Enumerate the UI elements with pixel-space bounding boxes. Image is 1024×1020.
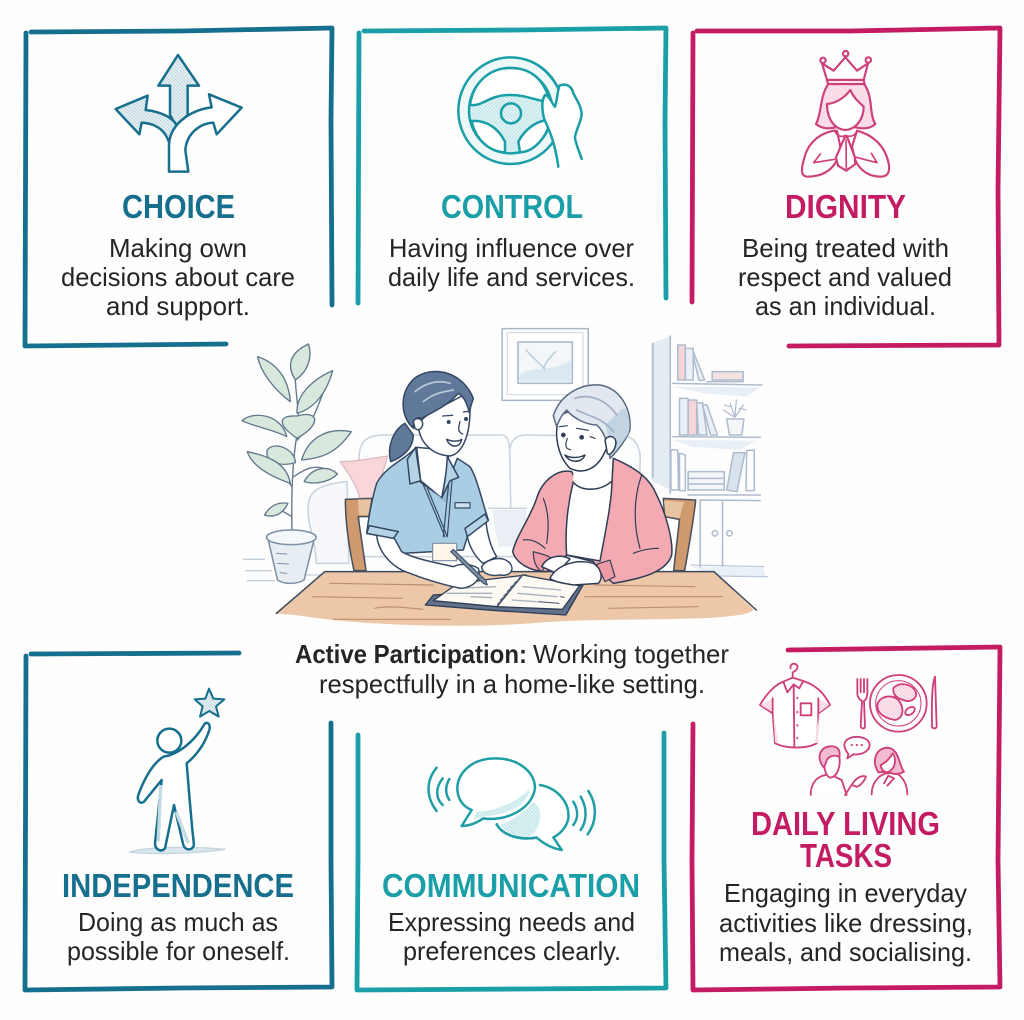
- frame: independence: [25, 653, 332, 990]
- text: control description: Having influence over: [389, 233, 634, 263]
- frame: control: [358, 28, 666, 303]
- icon: speech bubbles: [429, 758, 595, 850]
- frame: daily living tasks: [692, 647, 1000, 990]
- icon: crowned person: [802, 51, 889, 177]
- text: daily living tasks description: meals, and socialising.: [719, 937, 972, 967]
- frame: communication: [357, 733, 666, 990]
- carer: [367, 371, 512, 588]
- notebook: [425, 575, 583, 615]
- sofa: [308, 435, 640, 563]
- panel: control: [358, 28, 666, 303]
- text: communication description: [388, 907, 635, 966]
- pot: [267, 530, 316, 583]
- illustration: carer and older woman at a table: [242, 329, 767, 626]
- frame: dignity: [692, 28, 1000, 346]
- caption: respectfully in a home-like setting.: [319, 669, 705, 699]
- text: communication description: preferences clearly.: [403, 936, 621, 966]
- text: daily living tasks description: activities like dressing,: [719, 908, 973, 938]
- heading: communication: COMMUNICATION: [382, 867, 640, 904]
- bookcase: [651, 336, 762, 567]
- text: independence description: [67, 907, 290, 966]
- picture frame: [502, 329, 588, 400]
- plant: [242, 344, 351, 533]
- text: communication description: Expressing needs and: [388, 907, 635, 937]
- heading: daily living tasks: [751, 805, 940, 874]
- icon: figure reaching for star: [129, 689, 225, 854]
- icon: steering wheel and hand: [458, 57, 582, 167]
- panel: dignity: [692, 28, 1000, 346]
- chairs: [345, 498, 696, 571]
- heading: daily living tasks: DAILY LIVING: [751, 805, 940, 842]
- floor and room background: [244, 559, 767, 581]
- text: control description: [388, 233, 635, 292]
- heading: daily living tasks: TASKS: [800, 837, 892, 874]
- older woman: [513, 385, 672, 585]
- text: dignity description: respect and valued: [738, 262, 952, 292]
- icon: meal with cutlery: [857, 675, 937, 732]
- text: choice description: and support.: [106, 291, 250, 321]
- icon: two people talking: [811, 737, 907, 795]
- caption: Working together: [533, 639, 729, 669]
- text: control description: daily life and services.: [388, 262, 635, 292]
- heading: choice: CHOICE: [122, 188, 235, 225]
- text: dignity description: as an individual.: [755, 291, 936, 321]
- table: [275, 572, 756, 626]
- caption: Active Participation:: [295, 639, 527, 669]
- caption: [295, 639, 729, 699]
- heading: dignity: DIGNITY: [785, 188, 906, 225]
- text: choice description: [61, 233, 295, 321]
- text: independence description: Doing as much as: [78, 907, 278, 937]
- text: daily living tasks description: Engaging in everyday: [724, 878, 967, 908]
- heading: independence: INDEPENDENCE: [62, 867, 294, 904]
- pillow: [340, 456, 388, 498]
- panel: daily living tasks: [692, 647, 1000, 990]
- text: choice description: Making own: [109, 233, 247, 263]
- text: dignity description: Being treated with: [742, 233, 949, 263]
- text: daily living tasks description: [719, 878, 973, 967]
- icon: branching arrows: [116, 55, 242, 172]
- icon: shirt on hanger: [760, 664, 830, 748]
- text: independence description: possible for oneself.: [67, 936, 290, 966]
- text: dignity description: [738, 233, 952, 321]
- panel: choice: [25, 28, 332, 346]
- panel: independence: [25, 653, 332, 990]
- text: choice description: decisions about care: [61, 262, 295, 292]
- frame: choice: [25, 28, 332, 346]
- panel: communication: [357, 733, 666, 990]
- heading: control: CONTROL: [441, 188, 583, 225]
